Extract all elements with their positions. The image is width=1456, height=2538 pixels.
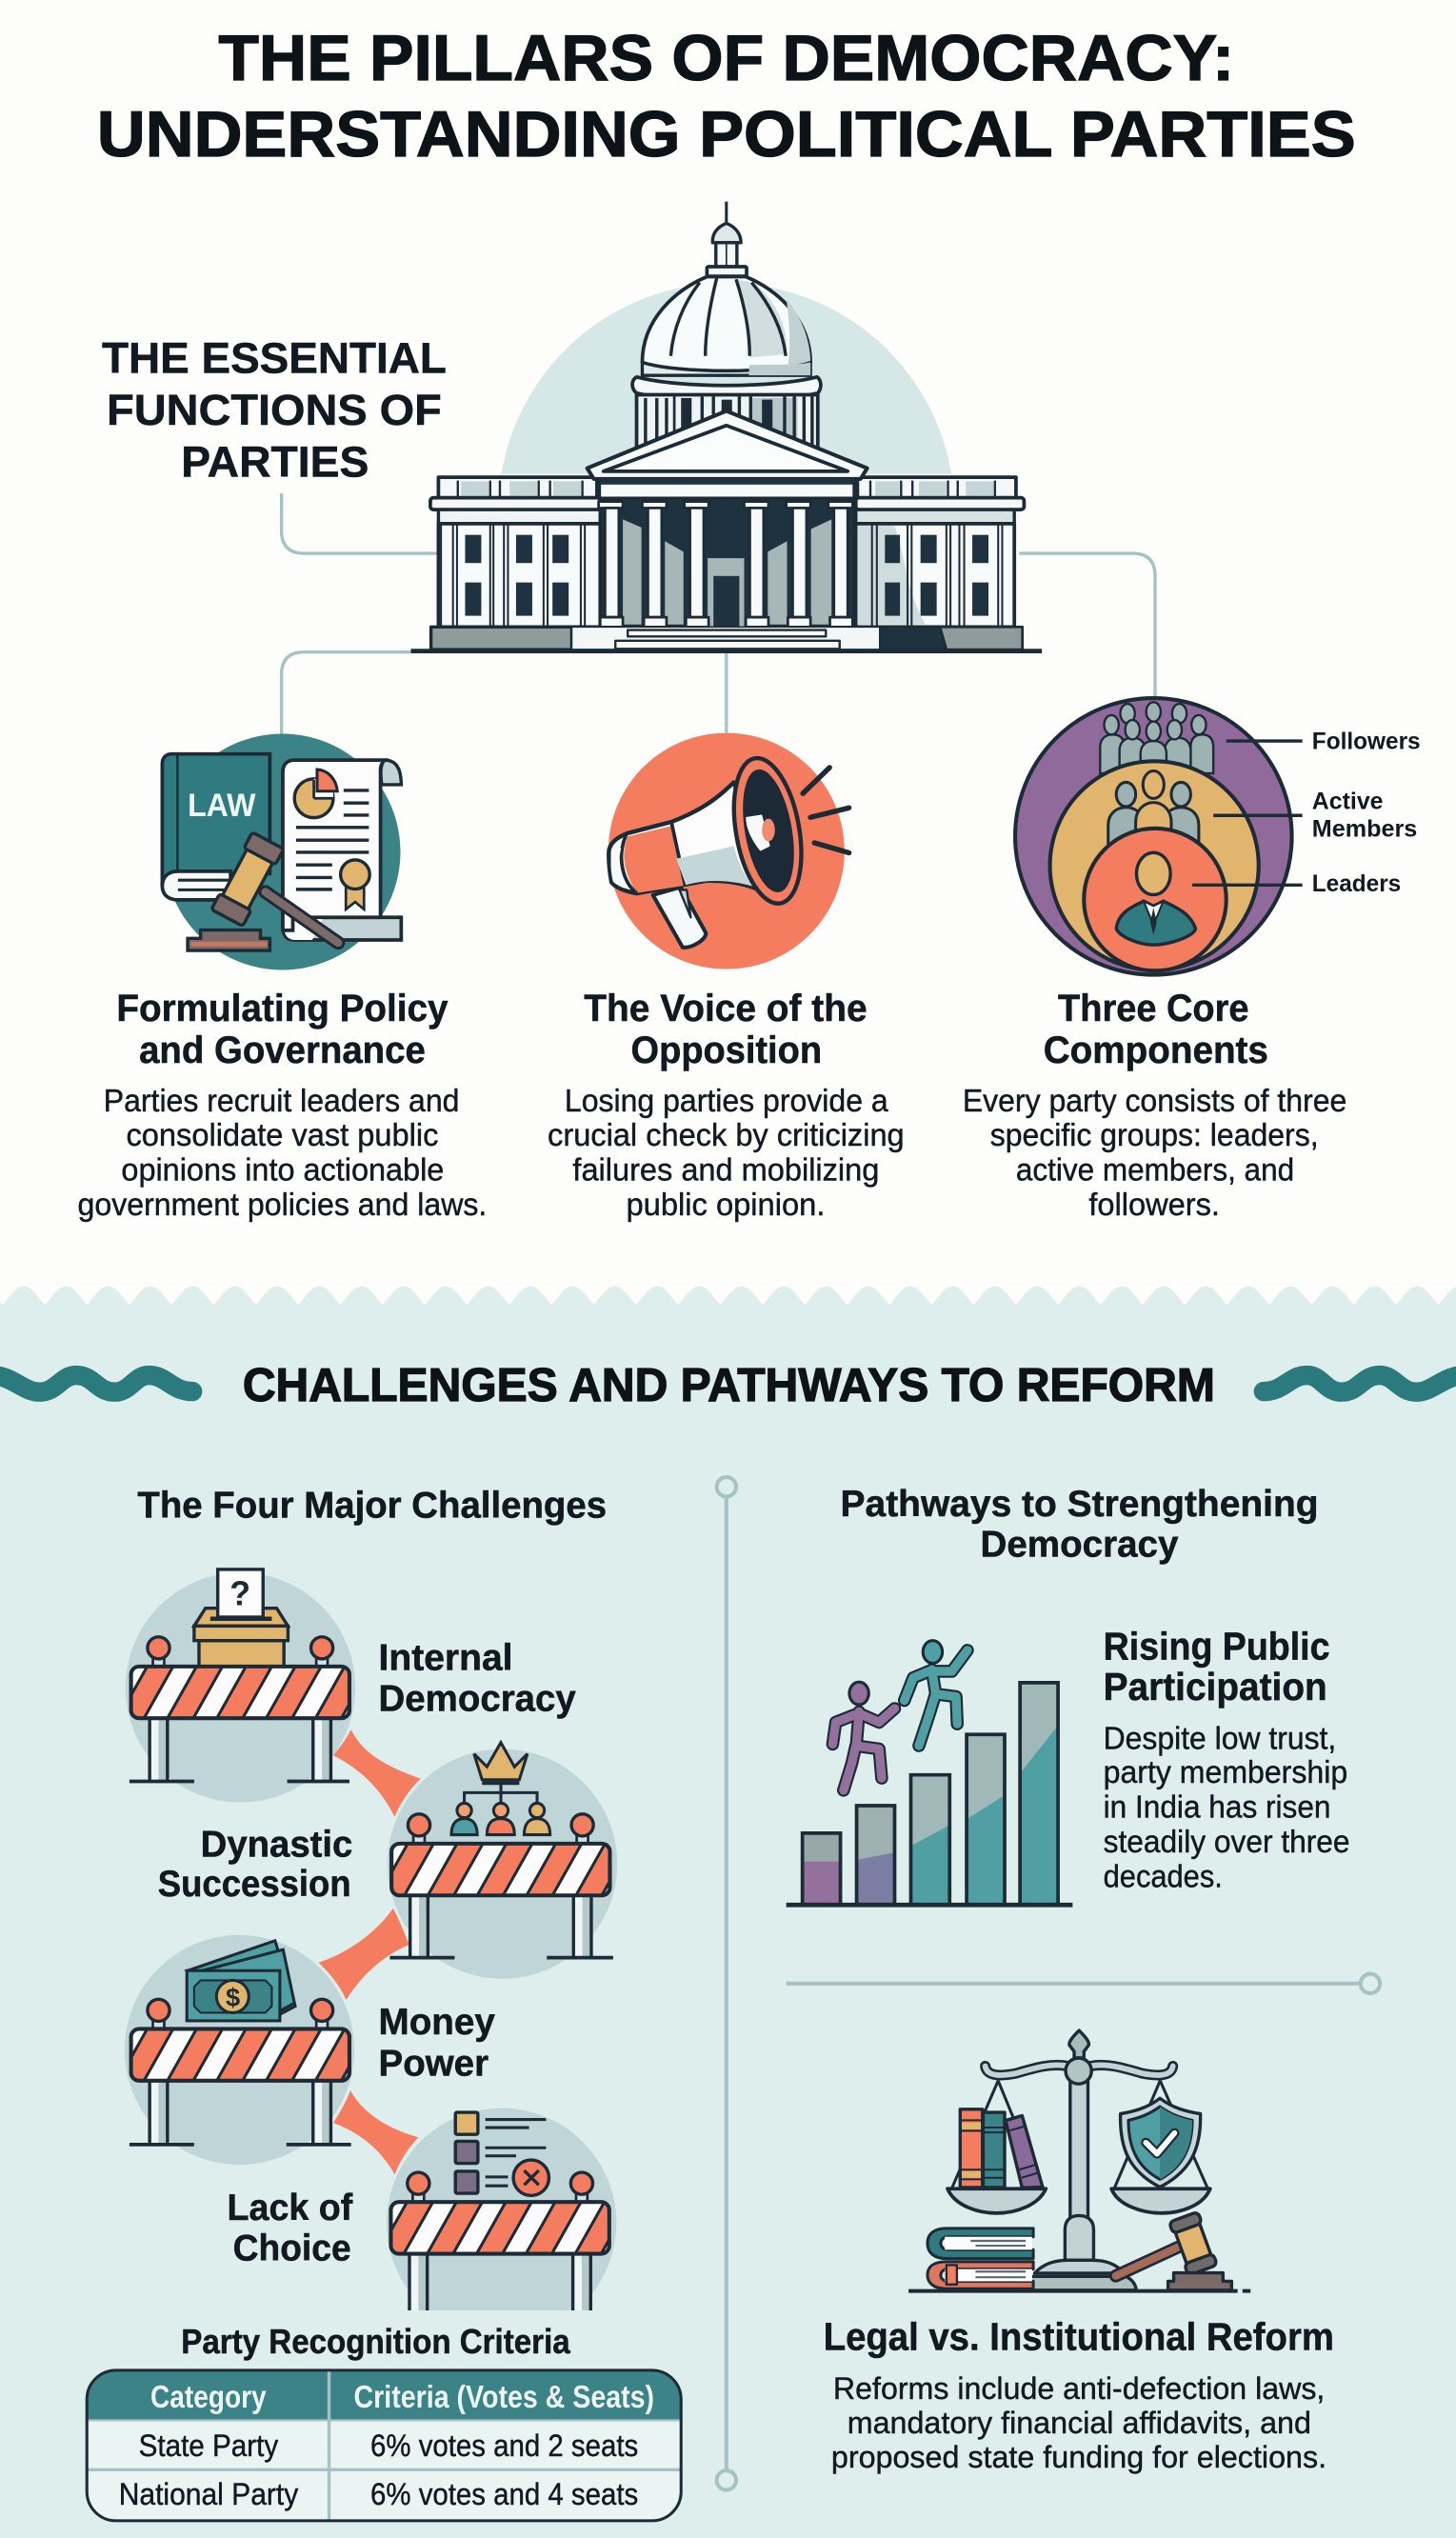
icon: megaphone (608, 733, 849, 969)
text: rising public participation: in India has risen (1104, 1789, 1331, 1825)
text: rising public participation: decades. (1104, 1860, 1223, 1895)
callout labels: Active (1312, 789, 1384, 814)
spire and lantern (726, 202, 728, 225)
pans (947, 2188, 1046, 2213)
table: party recognition criteria (87, 2370, 681, 2521)
text: legal vs institutional reform (824, 2315, 1334, 2474)
text: rising public participation (1104, 1624, 1350, 1895)
handle (653, 888, 706, 948)
challenge: money power: Power (379, 2044, 489, 2085)
left wing (438, 477, 597, 498)
heading: pathways (841, 1484, 1319, 1565)
bars (803, 1683, 1058, 1905)
ground line (908, 2289, 1250, 2292)
icon: capitol building (411, 202, 1042, 653)
horizontal divider (787, 1974, 1380, 1993)
windows (465, 535, 988, 616)
heading: party recognition criteria: Party Recognition Criteria (181, 2323, 571, 2361)
stacked books (927, 2228, 1033, 2259)
challenge: dynastic succession (158, 1743, 631, 1979)
text: legal vs institutional reform: Reforms include anti-defection laws, (833, 2371, 1325, 2406)
text: three core components: Three Core (1058, 988, 1249, 1029)
icon: three nested circles of party members (1015, 698, 1303, 975)
text: legal vs institutional reform: Legal vs. Institutional Reform (824, 2315, 1334, 2359)
text: three core components: Every party consists of three (963, 1084, 1346, 1119)
label: Money (379, 2002, 495, 2043)
right wing (857, 477, 1016, 498)
icon: banknotes (187, 1941, 295, 2021)
callout labels (1312, 729, 1421, 897)
icon: crown hierarchy (451, 1743, 550, 1835)
section heading: essential functions: PARTIES (181, 436, 369, 486)
callout labels: Members (1312, 816, 1417, 842)
icon: ballot list (455, 2112, 548, 2195)
label: Dynastic (201, 1824, 352, 1865)
challenge: lack of choice (229, 2108, 617, 2310)
vertical divider (717, 1477, 736, 2490)
title: UNDERSTANDING POLITICAL PARTIES (97, 98, 1356, 170)
figure: teal climber (905, 1641, 967, 1746)
challenge: internal democracy: Democracy (379, 1678, 576, 1719)
text: three core components (963, 988, 1346, 1223)
callout labels: Leaders (1312, 871, 1401, 897)
callout lines (1192, 741, 1303, 885)
figure: purple climber (832, 1682, 894, 1790)
label: Lack of (228, 2188, 353, 2228)
challenge: lack of choice: Choice (233, 2228, 351, 2268)
icon: law book and gavel (162, 733, 401, 969)
text: voice of the opposition: Opposition (631, 1029, 822, 1071)
base (431, 627, 571, 649)
challenge: money power (118, 1935, 495, 2165)
text: rising public participation: Participation (1104, 1665, 1327, 1709)
challenge: internal democracy (118, 1569, 576, 1803)
connector lines (282, 493, 1155, 736)
text: voice of the opposition: The Voice of the (584, 988, 868, 1029)
wave ornament right (1264, 1375, 1456, 1392)
icon: law book and gavel: LAW (188, 788, 256, 824)
table: party recognition criteria: 6% votes and 4 seats (370, 2477, 638, 2511)
section heading: essential functions: THE ESSENTIAL (102, 333, 447, 383)
text: formulating policy: consolidate vast public (127, 1118, 438, 1153)
bell (724, 753, 811, 909)
books on pan (960, 2109, 983, 2188)
followers crowd (1100, 702, 1213, 773)
title: THE PILLARS OF DEMOCRACY: (218, 22, 1234, 94)
text: formulating policy: Formulating Policy (116, 988, 449, 1029)
barrier (379, 1814, 631, 1959)
text: rising public participation: party membership (1104, 1755, 1347, 1790)
gavel (266, 892, 338, 943)
icon: banknotes: $ (226, 1983, 240, 2012)
section heading: challenges and pathways: CHALLENGES AND PATHWAYS TO REFORM (243, 1359, 1215, 1411)
heading: pathways: Pathways to Strengthening (841, 1484, 1319, 1525)
wing pilasters (441, 524, 1002, 626)
pole (1070, 2079, 1088, 2222)
icon: ballot box (194, 1569, 288, 1667)
scroll document (283, 760, 389, 930)
active members (1108, 771, 1199, 845)
shield (1121, 2098, 1201, 2188)
portico (600, 498, 854, 627)
text: formulating policy: and Governance (139, 1029, 426, 1071)
heading: pathways: Democracy (981, 1524, 1179, 1565)
bottom scroll (284, 917, 401, 940)
section heading: essential functions: FUNCTIONS OF (107, 385, 442, 434)
ropes (952, 2081, 1207, 2188)
text: three core components: followers. (1088, 1188, 1220, 1223)
text: rising public participation: Despite low trust, (1104, 1722, 1336, 1757)
drum (632, 377, 821, 400)
barrier (378, 2172, 630, 2317)
coral connectors between challenges (319, 1729, 421, 2174)
table: party recognition criteria: Category (150, 2380, 267, 2415)
dome (642, 277, 810, 370)
icon: scales of justice (908, 2030, 1250, 2291)
cone (608, 783, 782, 903)
text: voice of the opposition: crucial check by criticizing (548, 1118, 905, 1153)
table: party recognition criteria: Criteria (Votes & Seats) (354, 2380, 654, 2415)
pediment (588, 411, 868, 479)
label: Internal (379, 1637, 513, 1678)
text: voice of the opposition: Losing parties provide a (565, 1084, 888, 1119)
heading: four major challenges: The Four Major Challenges (137, 1486, 607, 1527)
text: rising public participation: steadily over three (1104, 1825, 1350, 1860)
challenge: dynastic succession: Succession (158, 1864, 351, 1905)
barrier (118, 1637, 370, 1781)
text: legal vs institutional reform: proposed state funding for elections. (831, 2440, 1326, 2474)
text: rising public participation: Rising Public (1104, 1624, 1329, 1668)
gavel (1116, 2248, 1178, 2276)
beam (986, 2065, 1173, 2075)
sound rays (803, 768, 849, 852)
text: formulating policy: government policies and laws. (78, 1188, 487, 1223)
section heading: essential functions (102, 333, 447, 486)
table: party recognition criteria: 6% votes and 2 seats (370, 2428, 638, 2463)
text: formulating policy (78, 988, 487, 1223)
text: voice of the opposition: public opinion. (626, 1188, 825, 1223)
text: three core components: active members, and (1016, 1152, 1294, 1188)
text: three core components: Components (1044, 1029, 1268, 1071)
table: party recognition criteria: National Party (119, 2477, 299, 2511)
lower panel background with scalloped edge (0, 1285, 1456, 2538)
text: legal vs institutional reform: mandatory financial affidavits, and (848, 2406, 1311, 2440)
capitol backdrop circle (501, 288, 951, 474)
text: formulating policy: opinions into actionable (121, 1152, 444, 1188)
title (97, 22, 1356, 170)
table: party recognition criteria: State Party (139, 2428, 279, 2463)
leader (1136, 852, 1170, 894)
barrier (118, 1999, 370, 2144)
bar chart: rising participation (787, 1641, 1072, 1905)
wave ornament left (0, 1375, 192, 1392)
icon: ballot box: ? (229, 1574, 250, 1612)
text: voice of the opposition (548, 988, 905, 1223)
text: formulating policy: Parties recruit leaders and (104, 1084, 459, 1119)
text: three core components: specific groups: leaders, (990, 1118, 1319, 1153)
callout labels: Followers (1312, 729, 1421, 755)
book (162, 754, 269, 887)
text: voice of the opposition: failures and mobilizing (572, 1152, 879, 1188)
